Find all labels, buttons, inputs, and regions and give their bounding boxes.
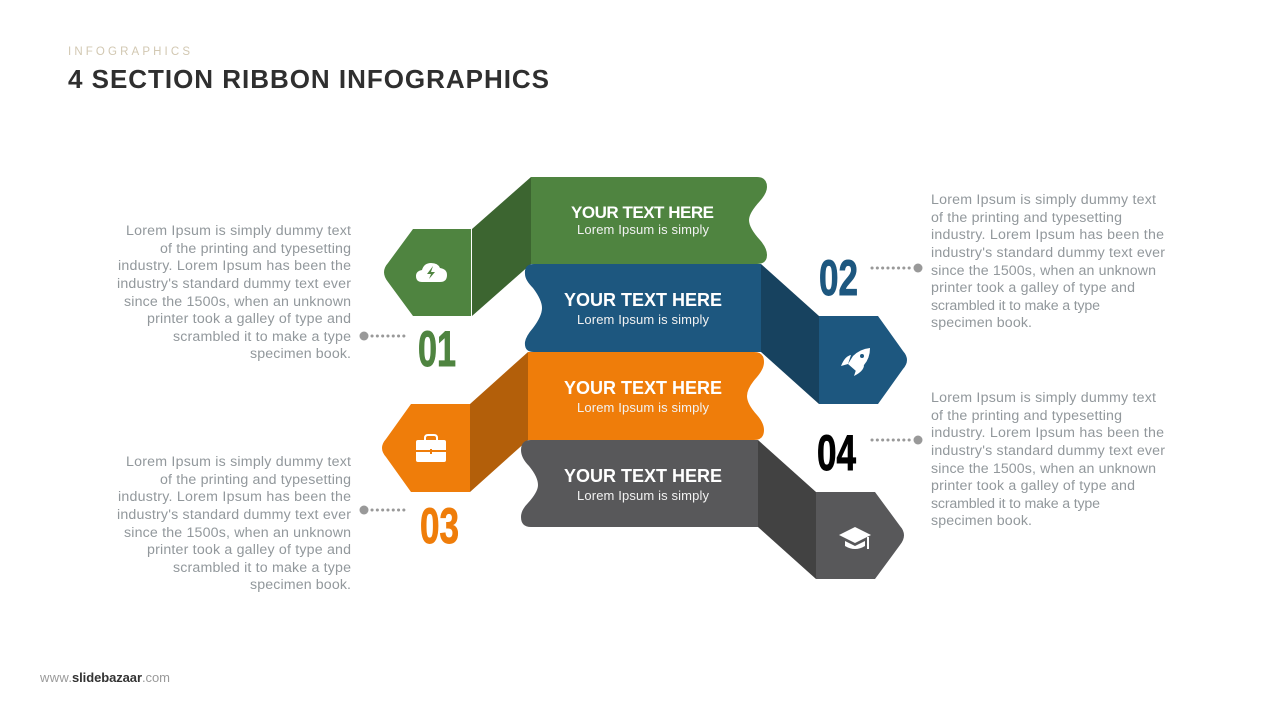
text block: section 3: printer took a galley of type and — [147, 542, 351, 558]
band text: gray — [564, 466, 722, 503]
band text: blue: Lorem Ipsum is simply — [577, 312, 710, 327]
number 03: 03 — [420, 498, 459, 554]
connector: 01 — [360, 332, 409, 340]
band text: blue — [564, 290, 722, 327]
icon: cloud with lightning — [416, 263, 447, 282]
band text: green — [571, 203, 714, 237]
number 01: 01 — [418, 321, 456, 377]
text block: section 3: scrambled it to make a type — [173, 560, 351, 576]
connector: 03 — [360, 506, 409, 514]
band: green — [531, 177, 767, 264]
text block: section 3: industry. Lorem Ipsum has been the — [118, 489, 351, 505]
text block: section 3: specimen book. — [250, 577, 351, 593]
icon: briefcase — [416, 435, 446, 462]
fold: green — [472, 177, 531, 316]
text block: section 2: since the 1500s, when an unknown — [931, 263, 1156, 279]
text block: section 2: printer took a galley of type and — [931, 280, 1135, 296]
text block: section 2: scrambled it to make a type — [931, 298, 1100, 314]
text block: section 2: industry. Lorem Ipsum has been the — [931, 227, 1164, 243]
connector: 04 — [872, 436, 922, 444]
band text: gray: Lorem Ipsum is simply — [577, 488, 710, 503]
text block: section 1: of the printing and typesetting — [160, 241, 351, 257]
text block: section 4: industry. Lorem Ipsum has been the — [931, 425, 1164, 441]
text block: section 1: printer took a galley of type and — [147, 311, 351, 327]
text block: section 4: scrambled it to make a type — [931, 496, 1100, 512]
connector: 02 — [872, 264, 922, 272]
fold: orange — [470, 352, 528, 492]
band text: green: Lorem Ipsum is simply — [577, 222, 710, 237]
footer brand — [39, 670, 170, 685]
hexagon tab: gray — [816, 492, 904, 579]
text block: section 3: since the 1500s, when an unknown — [124, 525, 351, 541]
text block: section 4 — [931, 390, 1165, 529]
text block: section 3 — [117, 454, 351, 593]
text block: section 1: industry's standard dummy text ever — [117, 276, 351, 292]
hexagon tab: orange — [382, 404, 470, 492]
ribbon section 2: blue — [524, 264, 907, 404]
text block: section 2: of the printing and typesetting — [931, 210, 1122, 226]
text block: section 3: Lorem Ipsum is simply dummy text — [126, 454, 351, 470]
band: orange — [528, 352, 764, 440]
title: 4 SECTION RIBBON INFOGRAPHICS — [68, 64, 549, 94]
icon: graduation cap — [839, 527, 871, 549]
text block: section 4: of the printing and typesetting — [931, 408, 1122, 424]
text block: section 1: Lorem Ipsum is simply dummy text — [126, 223, 351, 239]
eyebrow label: INFOGRAPHICS — [68, 46, 190, 58]
footer brand: www. — [39, 670, 72, 685]
text block: section 1: industry. Lorem Ipsum has been the — [118, 258, 351, 274]
band text: green: YOUR TEXT HERE — [571, 203, 714, 222]
band text: orange: Lorem Ipsum is simply — [577, 400, 710, 415]
text block: section 2: specimen book. — [931, 315, 1032, 331]
band text: blue: YOUR TEXT HERE — [564, 290, 722, 310]
hexagon tab: blue — [819, 316, 907, 404]
text block: section 3: of the printing and typesetting — [160, 472, 351, 488]
band text: gray: YOUR TEXT HERE — [564, 466, 722, 486]
number 04: 04 — [817, 425, 856, 481]
fold: blue — [761, 264, 819, 404]
text block: section 4: industry's standard dummy text ever — [931, 443, 1165, 459]
icon: rocket — [841, 348, 870, 376]
text block: section 1: since the 1500s, when an unknown — [124, 294, 351, 310]
band: blue — [524, 264, 761, 352]
text block: section 4: since the 1500s, when an unknown — [931, 461, 1156, 477]
band text: orange — [564, 378, 722, 415]
band: gray — [521, 440, 758, 527]
text block: section 2: industry's standard dummy text ever — [931, 245, 1165, 261]
hexagon tab: green — [384, 229, 471, 316]
text block: section 4: Lorem Ipsum is simply dummy text — [931, 390, 1156, 406]
text block: section 4: specimen book. — [931, 513, 1032, 529]
footer brand: .com — [142, 670, 170, 685]
text block: section 1 — [117, 223, 351, 362]
ribbon section 1: green — [384, 177, 767, 316]
ribbon section 3: orange — [382, 352, 764, 492]
footer brand: slidebazaar — [72, 670, 142, 685]
text block: section 2: Lorem Ipsum is simply dummy text — [931, 192, 1156, 208]
text block: section 4: printer took a galley of type and — [931, 478, 1135, 494]
number 02: 02 — [819, 250, 858, 306]
text block: section 1: scrambled it to make a type — [173, 329, 351, 345]
text block: section 1: specimen book. — [250, 346, 351, 362]
fold: gray — [758, 440, 816, 579]
text block: section 3: industry's standard dummy text ever — [117, 507, 351, 523]
text block: section 2 — [931, 192, 1165, 331]
ribbon section 4: gray — [521, 440, 904, 579]
band text: orange: YOUR TEXT HERE — [564, 378, 722, 398]
